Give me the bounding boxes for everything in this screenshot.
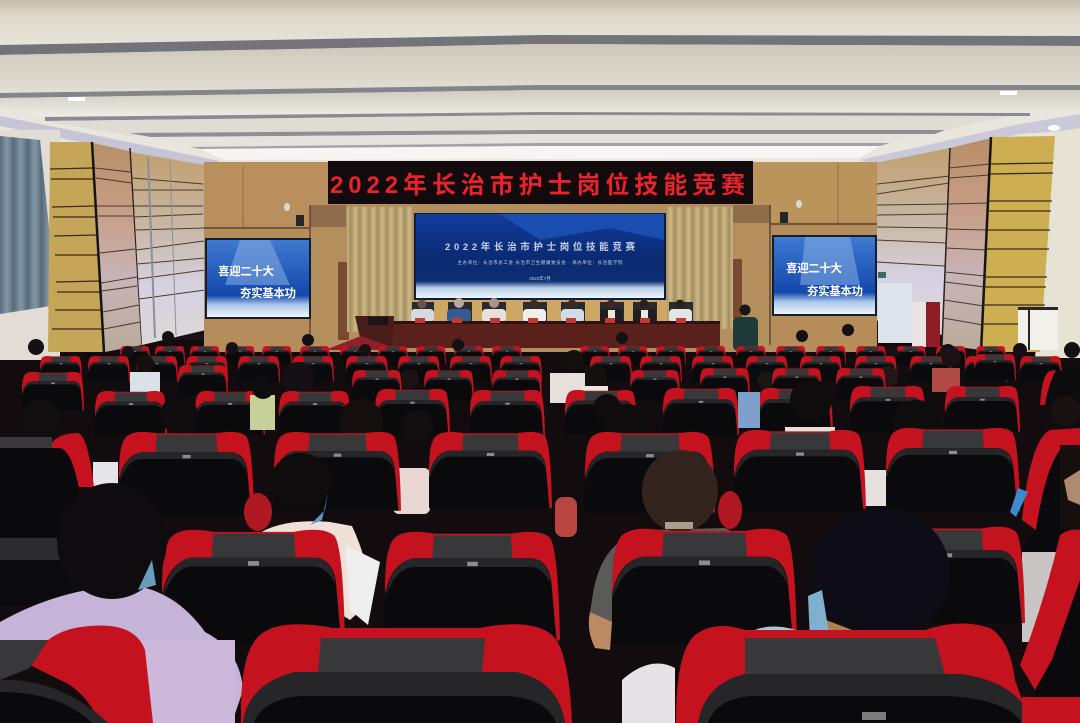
side doors <box>338 262 349 340</box>
front row audience <box>0 483 950 723</box>
person with dark hair and mask <box>745 507 950 645</box>
light wall panel <box>131 152 206 345</box>
red carpet <box>325 336 400 350</box>
screen date: 2022年7月 <box>529 275 551 282</box>
right soffit edge <box>860 114 1080 165</box>
exit door <box>878 283 912 343</box>
standing photographer <box>733 304 758 351</box>
right edge person <box>1060 445 1080 530</box>
floor and shadow background <box>0 340 1080 723</box>
seated woman with mask <box>255 453 380 625</box>
center curtains <box>347 207 412 332</box>
row D <box>95 386 1020 436</box>
panel of eight officials <box>411 298 693 324</box>
blue-grey curtain <box>0 136 57 314</box>
white lectern <box>1018 308 1058 350</box>
slogan line one: 喜迎二十大 <box>786 261 842 275</box>
white side wall <box>1035 128 1080 358</box>
left front seat <box>0 626 153 723</box>
far seating rows and audience <box>0 324 1080 723</box>
tablet <box>1010 488 1028 517</box>
screen organisers line: 主办单位：长治市总工会 长治市卫生健康委员会 · 承办单位：长治医学院 <box>458 259 623 266</box>
row B audience <box>255 445 1080 650</box>
slogan line two: 夯实基本功 <box>807 284 863 298</box>
recess behind stage <box>310 205 770 350</box>
tan wall panel <box>942 138 991 350</box>
pale wall under curtain <box>0 130 60 360</box>
left side screen <box>205 238 311 319</box>
slogan line one: 喜迎二十大 <box>218 264 274 278</box>
woman in lilac blouse <box>0 483 243 723</box>
cameras and speakers <box>296 215 304 226</box>
left soffit edge <box>0 116 220 166</box>
stage table <box>386 318 720 348</box>
row F audience <box>130 347 1080 424</box>
LED banner <box>328 161 753 204</box>
far row G <box>120 346 1006 365</box>
yellow wood panel <box>48 142 105 352</box>
right edge red seat <box>1022 697 1080 723</box>
light wall panel <box>875 148 950 335</box>
ceiling <box>0 0 1080 170</box>
row E <box>22 354 1080 410</box>
right edge striped shirt <box>1022 552 1058 642</box>
yellow wood panel <box>981 136 1055 352</box>
far audience heads <box>28 324 1080 360</box>
centre front seat <box>241 624 572 723</box>
row C <box>0 428 1080 555</box>
LED banner: 2022年长治市护士岗位技能竞赛 <box>330 171 745 199</box>
main projection screen <box>414 213 666 300</box>
right front seat <box>676 623 1032 723</box>
screen title: 2022年长治市护士岗位技能竞赛 <box>445 241 635 253</box>
lectern <box>355 316 394 346</box>
left wall <box>0 130 206 360</box>
slogan line two: 夯实基本功 <box>240 286 296 300</box>
woman with bob haircut <box>589 450 745 650</box>
tan wall panel <box>93 143 142 352</box>
right side screen <box>772 235 877 316</box>
ceiling lights <box>68 97 85 101</box>
row B <box>0 527 1080 697</box>
row D audience <box>22 377 1080 514</box>
right wall <box>875 128 1080 358</box>
white bag <box>622 664 675 723</box>
seat cushion and folded seats <box>244 491 742 537</box>
row A <box>0 623 1080 723</box>
row F <box>40 356 1062 382</box>
back wall <box>204 162 877 352</box>
